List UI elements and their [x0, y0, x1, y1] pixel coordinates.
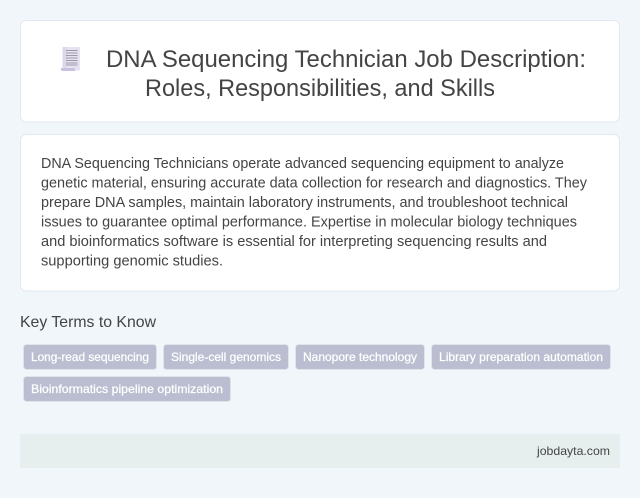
tag: long-read sequencing: [24, 344, 156, 370]
tag: single-cell genomics: [164, 344, 288, 370]
footer: [20, 434, 620, 468]
text block: description: [41, 156, 588, 270]
icon: document scroll: [61, 47, 80, 71]
tag: library preparation automation: [432, 344, 610, 370]
heading: key terms: Key Terms to Know: [20, 314, 156, 331]
text block: description: genetic material, ensuring accurate data collection for research and diagnostics. They: [41, 176, 588, 192]
tag: long-read sequencing: Long-read sequencing: [31, 350, 149, 364]
panel: title card: [20, 20, 620, 122]
footer: jobdayta.com: [536, 444, 610, 458]
tag: library preparation automation: Library preparation automation: [439, 350, 603, 364]
text block: description: DNA Sequencing Technicians operate advanced sequencing equipment to analyze: [41, 156, 564, 172]
panel: description: [20, 134, 620, 291]
tag: nanopore technology: [296, 344, 424, 370]
text block: description: prepare DNA samples, maintain laboratory instruments, and troubleshoot technical: [41, 195, 568, 211]
text block: description: supporting genomic studies.: [41, 254, 223, 270]
tag: bioinformatics pipeline optimization: [24, 376, 230, 402]
tag: single-cell genomics: Single-cell genomics: [171, 350, 281, 364]
tag: bioinformatics pipeline optimization: Bioinformatics pipeline optimization: [31, 382, 223, 396]
text block: description: issues to guarantee optimal performance. Expertise in molecular biology techniques: [41, 214, 577, 230]
title: Roles, Responsibilities, and Skills: [145, 75, 495, 102]
title: [106, 46, 586, 102]
tags: key terms: [24, 344, 610, 402]
text block: description: and bioinformatics software is essential for interpreting sequencing results and: [41, 234, 547, 250]
title: DNA Sequencing Technician Job Description:: [106, 46, 586, 73]
tag: nanopore technology: Nanopore technology: [303, 350, 417, 364]
